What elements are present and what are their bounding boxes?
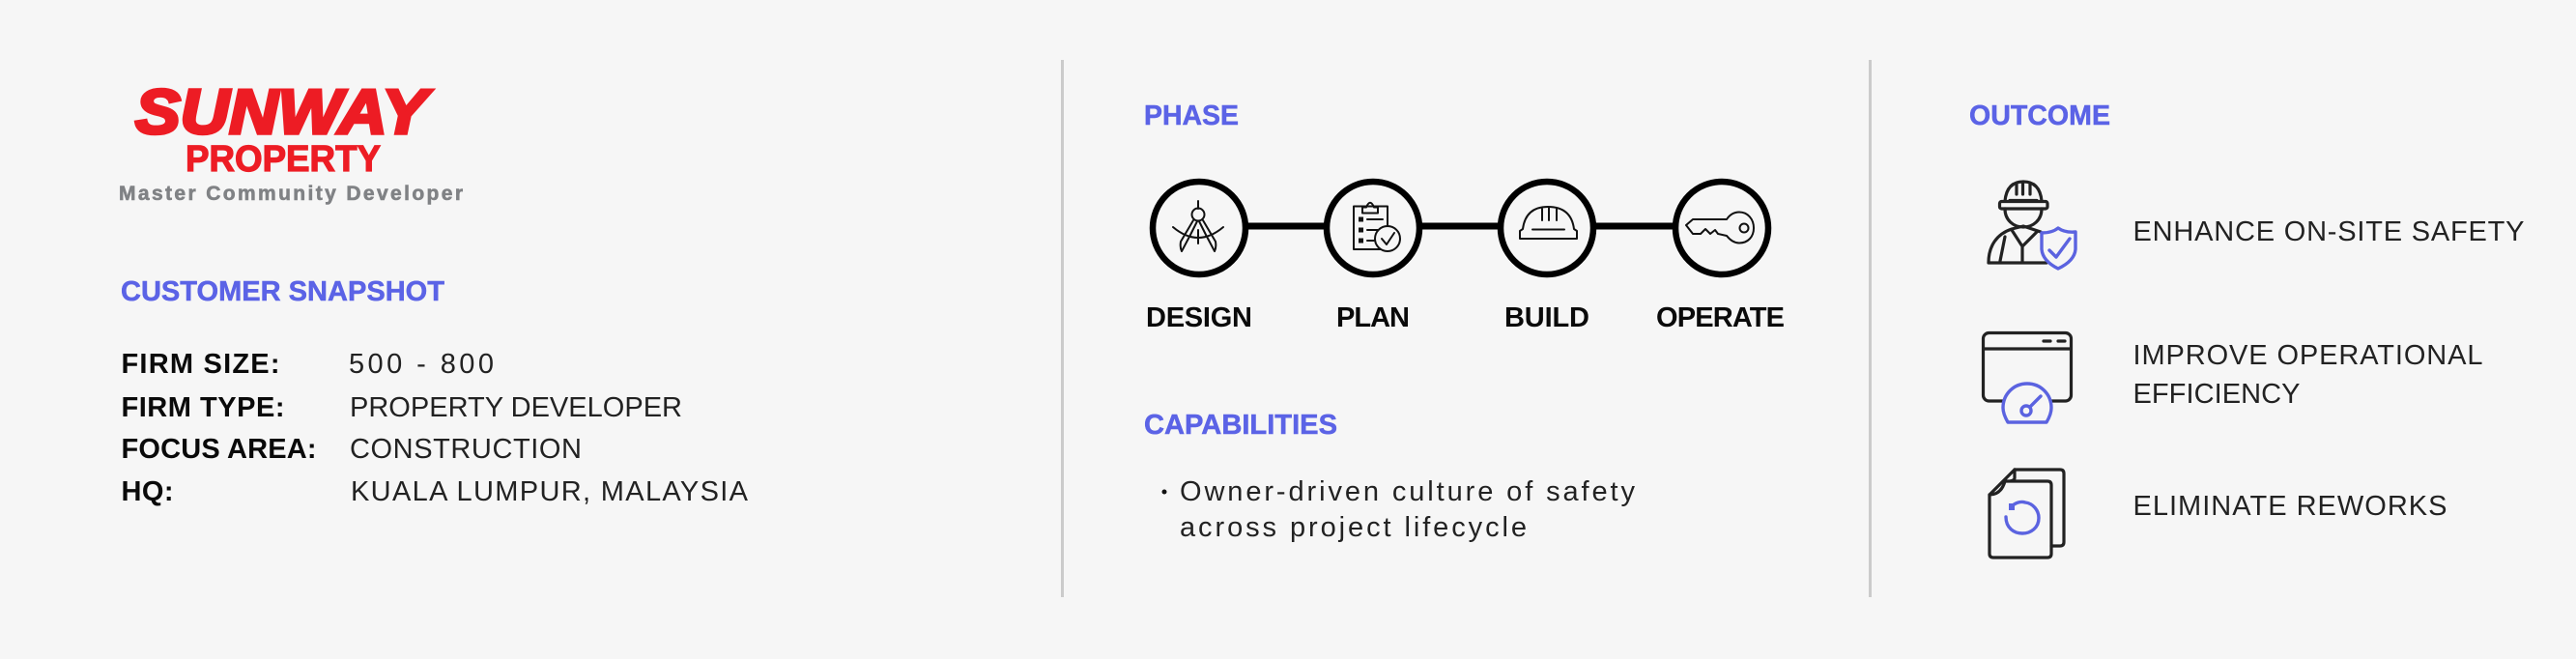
panel: phase and capabilities (1144, 100, 1785, 543)
text block: firm details: HQ: (122, 476, 174, 507)
text block: firm details: 500 - 800 (349, 349, 494, 380)
heading: customer snapshot: CUSTOMER SNAPSHOT (121, 276, 444, 307)
timeline: phases (1146, 182, 1785, 333)
logo: Sunway Property: Master Community Developer (119, 183, 463, 205)
text: eliminate reworks: ELIMINATE REWORKS (2133, 491, 2447, 522)
icon: documents with redo (1989, 470, 2064, 558)
text block: firm details: FIRM SIZE: (122, 349, 280, 380)
text block: firm details: FOCUS AREA: (122, 434, 317, 465)
heading: outcome: OUTCOME (1969, 100, 2110, 131)
panel: customer snapshot (119, 76, 749, 507)
icon: operate key (1675, 182, 1768, 274)
logo: Sunway Property: SUNWAY (135, 76, 433, 147)
icon: build hard hat (1501, 182, 1593, 274)
logo: Sunway Property: PROPERTY (186, 139, 381, 180)
icon: plan checklist (1327, 182, 1419, 274)
logo: Sunway Property (119, 76, 463, 205)
panel: outcome (1969, 100, 2524, 558)
text block: firm details: KUALA LUMPUR, MALAYSIA (351, 476, 749, 507)
heading: capabilities: CAPABILITIES (1144, 410, 1337, 441)
icon: worker with shield (1989, 182, 2075, 269)
heading: phase: PHASE (1144, 100, 1239, 131)
text block: firm details: CONSTRUCTION (350, 434, 582, 465)
label: plan: PLAN (1336, 302, 1410, 333)
text block: firm details: PROPERTY DEVELOPER (350, 392, 682, 423)
text: improve operational efficiency: EFFICIENCY (2133, 379, 2300, 410)
text: improve operational efficiency (2133, 340, 2483, 410)
icon: browser window with gauge (1983, 332, 2072, 422)
text: improve operational efficiency: IMPROVE OPERATIONAL (2133, 340, 2483, 371)
text block: capabilities bullet: Owner-driven culture of safety (1180, 476, 1635, 507)
icon: design compass (1153, 182, 1245, 274)
text block: firm details: FIRM TYPE: (122, 392, 284, 423)
text block: capabilities bullet (1161, 476, 1635, 543)
text: enhance on-site safety: ENHANCE ON-SITE SAFETY (2133, 216, 2524, 247)
label: build: BUILD (1504, 302, 1589, 333)
label: operate: OPERATE (1656, 302, 1785, 333)
label: design: DESIGN (1146, 302, 1252, 333)
text block: capabilities bullet: across project lifecycle (1180, 512, 1527, 543)
text block: firm details (122, 349, 749, 507)
